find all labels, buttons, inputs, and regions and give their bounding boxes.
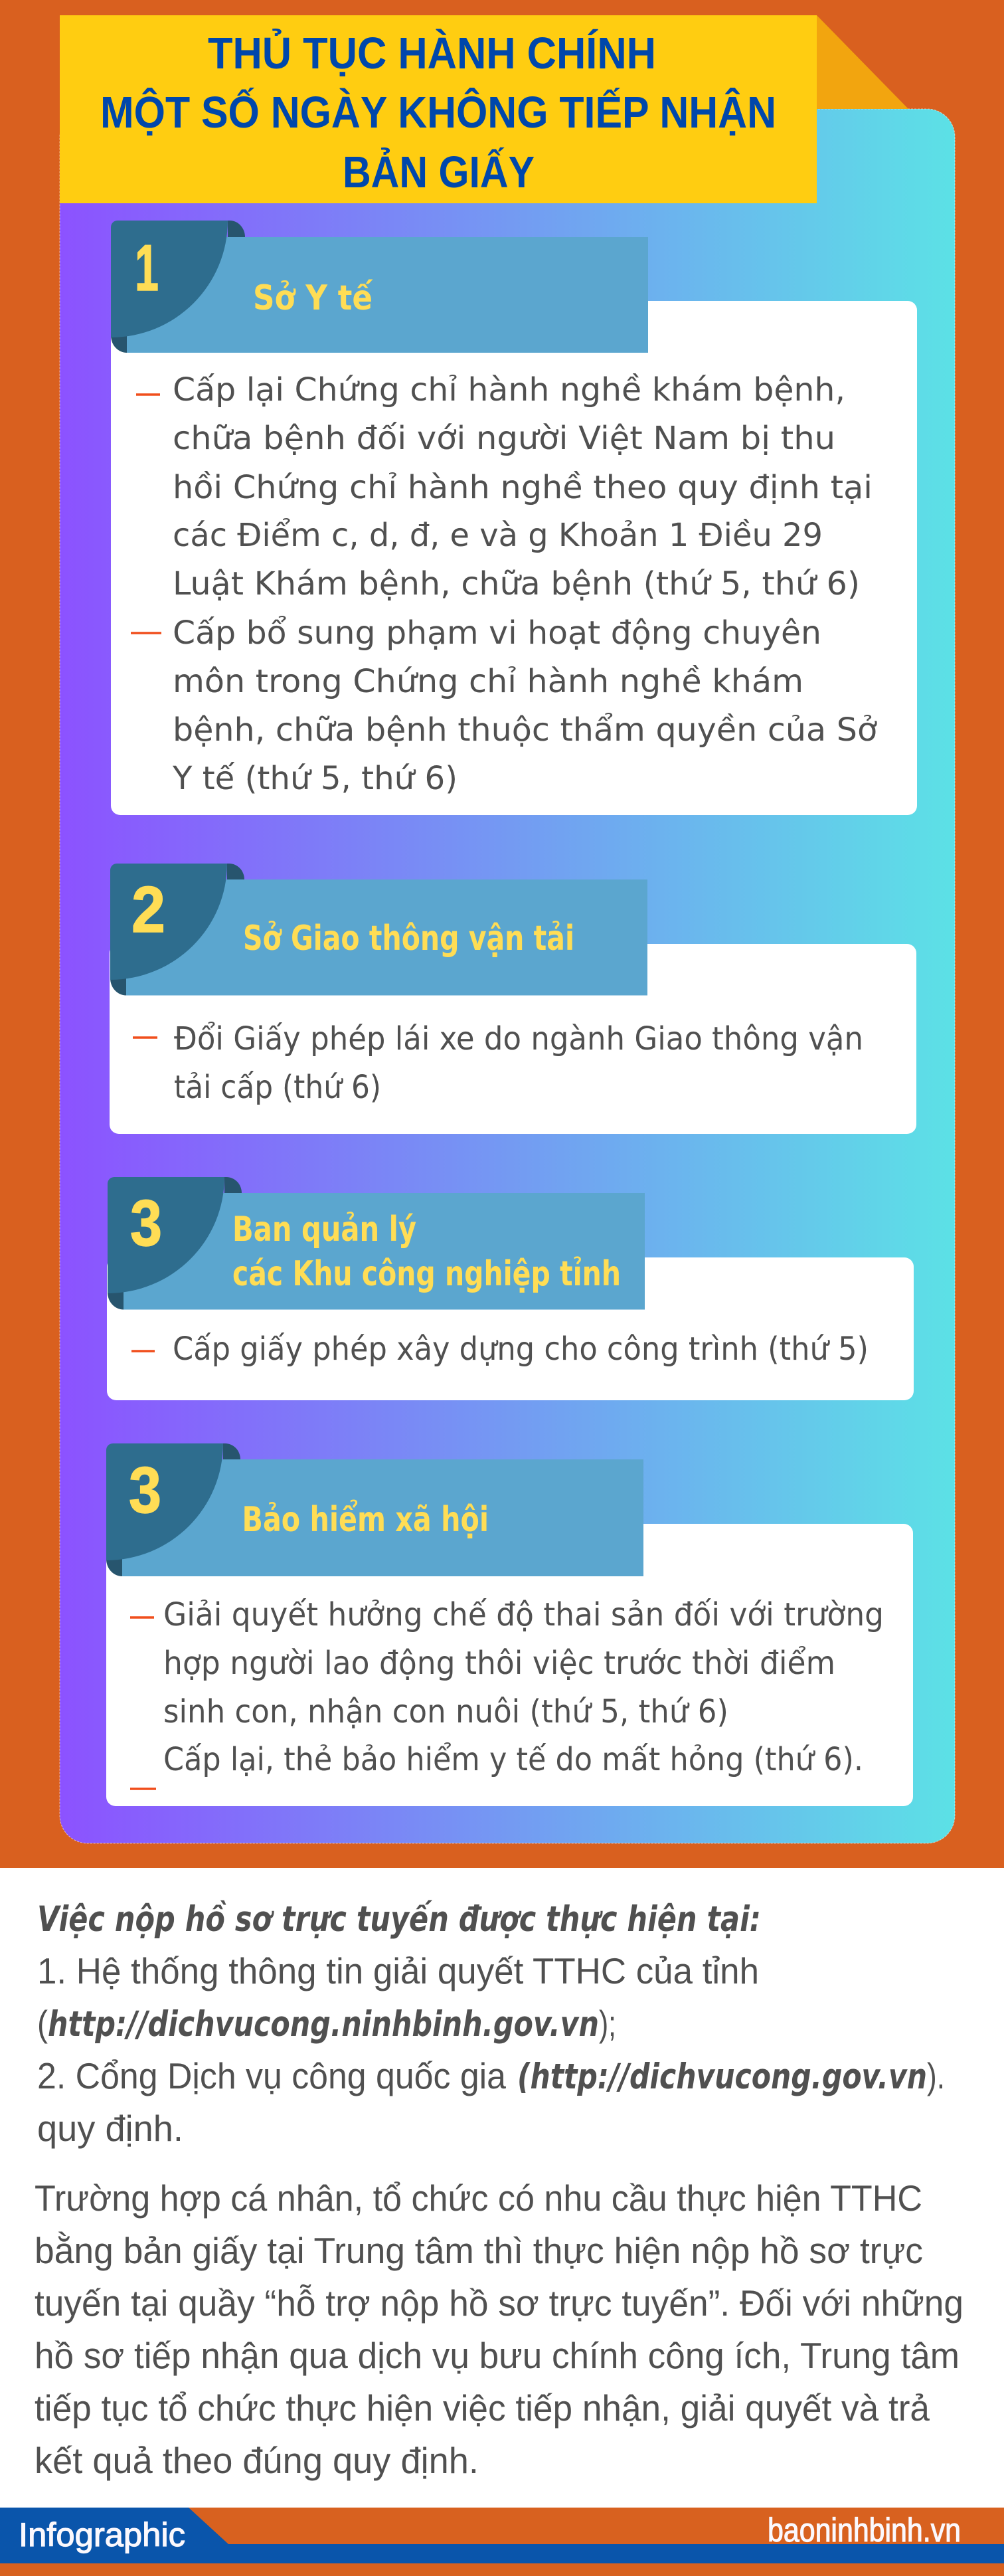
text: first bullet [173,371,873,602]
footer site name: baoninhbinh.vn [768,2512,961,2549]
text: bullet: Đổi Giấy phép lái xe do ngành Giao thông vận [174,1020,863,1058]
title ribbon fold [817,15,908,109]
bullet dash [131,632,161,634]
bullet dash [131,1350,155,1352]
text: second bullet [172,614,877,797]
ribbon: Bảo hiểm xã hội [106,1443,643,1576]
bullet dash [133,1036,157,1039]
item 1: ( [37,2003,48,2044]
text: second bullet: Cấp bổ sung phạm vi hoạt động chuyên [173,614,821,652]
number 2: 2 [131,873,165,946]
heading: Ban quản lý các Khu công nghiệp tỉnh [232,1210,621,1294]
bullet dash [130,1616,154,1619]
heading: Sở Giao thông vận tải: Sở Giao thông vận tải [243,919,574,959]
text block: paper submission paragraph: bằng bản giấy tại Trung tâm thì thực hiện nộp hồ sơ trực [35,2230,923,2271]
orange background [0,0,1004,1868]
title banner [60,15,817,203]
panel: Sở Giao thông vận tải card [110,864,916,1134]
text: first bullet: các Điểm c, d, đ, e và g Khoản 1 Điều 29 [173,517,823,554]
number 3: 3 [129,1453,161,1526]
text: bullet: Cấp giấy phép xây dựng cho công trình (thứ 5) [173,1331,869,1368]
title line 3: BẢN GIẤY [343,147,535,197]
text: first bullet: Luật Khám bệnh, chữa bệnh (thứ 5, thứ 6) [173,565,860,602]
text: first bullet [163,1596,884,1730]
title line 1: THỦ TỤC HÀNH CHÍNH [208,29,656,78]
item 1: ); [599,2003,616,2044]
text: first bullet: Cấp lại Chứng chỉ hành nghề khám bệnh, [173,371,845,409]
text: first bullet: hồi Chứng chỉ hành nghề theo quy định tại [173,469,873,506]
number 3: 3 [130,1186,162,1259]
text block: paper submission paragraph: tiếp tục tổ chức thực hiện việc tiếp nhận, giải quyết và trả [35,2387,930,2429]
heading: Bảo hiểm xã hội: Bảo hiểm xã hội [242,1499,489,1540]
text: bullet: tải cấp (thứ 6) [174,1069,381,1106]
ribbon: Sở Giao thông vận tải [110,864,647,995]
panel: Sở Y tế card [111,221,917,815]
heading: Ban quản lý các Khu công nghiệp tỉnh: Ban quản lý [232,1210,416,1249]
footer band [0,2508,1004,2576]
text block: paper submission paragraph: tuyến tại quầy “hỗ trợ nộp hồ sơ trực tuyến”. Đối với những [35,2282,963,2324]
item 1: 1. Hệ thống thông tin giải quyết TTHC của tỉnh [37,1950,759,1991]
item 2 [37,2055,945,2149]
footer label: Infographic [19,2516,185,2553]
panel: Ban quản lý card [107,1177,914,1400]
heading: Ban quản lý các Khu công nghiệp tỉnh: các Khu công nghiệp tỉnh [232,1254,621,1294]
item 1: http://dichvucong.ninhbinh.gov.vn [48,2004,599,2045]
heading: Sở Y tế: Sở Y tế [253,278,373,318]
text: first bullet: Giải quyết hưởng chế độ thai sản đối với trường [163,1596,884,1633]
text: second bullet: Y tế (thứ 5, thứ 6) [172,760,458,797]
bullet dash [130,1788,156,1790]
text: first bullet: hợp người lao động thôi việc trước thời điểm [163,1645,835,1682]
number 1: 1 [135,231,159,304]
text: first bullet: chữa bệnh đối với người Việt Nam bị thu [173,420,835,457]
text block: paper submission paragraph: hồ sơ tiếp nhận qua dịch vụ bưu chính công ích, Trung tâm [35,2335,960,2376]
text block: online submission [37,1899,945,2149]
panel: Bảo hiểm xã hội card [106,1443,913,1806]
ribbon: Sở Y tế [111,221,648,353]
item 2: 2. Cổng Dịch vụ công quốc gia [37,2055,506,2096]
subheading: Việc nộp hồ sơ trực tuyến được thực hiện tại: [37,1899,761,1940]
text: second bullet: môn trong Chứng chỉ hành nghề khám [173,663,803,700]
bullet dash [136,393,160,396]
text: second bullet: bệnh, chữa bệnh thuộc thẩm quyền của Sở [173,711,877,749]
gradient main panel [60,109,955,1843]
text block: paper submission paragraph: kết quả theo đúng quy định. [35,2440,479,2481]
text: bullet [174,1020,863,1106]
text block: paper submission paragraph: Trường hợp cá nhân, tổ chức có nhu cầu thực hiện TTHC [35,2177,922,2219]
item 2: quy định. [37,2108,183,2149]
ribbon: Ban quản lý [108,1177,645,1310]
item 2: ). [927,2055,945,2096]
item 1 [37,1950,759,2045]
text block: paper submission paragraph [35,2177,963,2481]
title line 2: MỘT SỐ NGÀY KHÔNG TIẾP NHẬN [100,87,776,138]
text: first bullet: sinh con, nhận con nuôi (thứ 5, thứ 6) [163,1693,728,1730]
text: second bullet: Cấp lại, thẻ bảo hiểm y tế do mất hỏng (thứ 6). [163,1741,863,1778]
